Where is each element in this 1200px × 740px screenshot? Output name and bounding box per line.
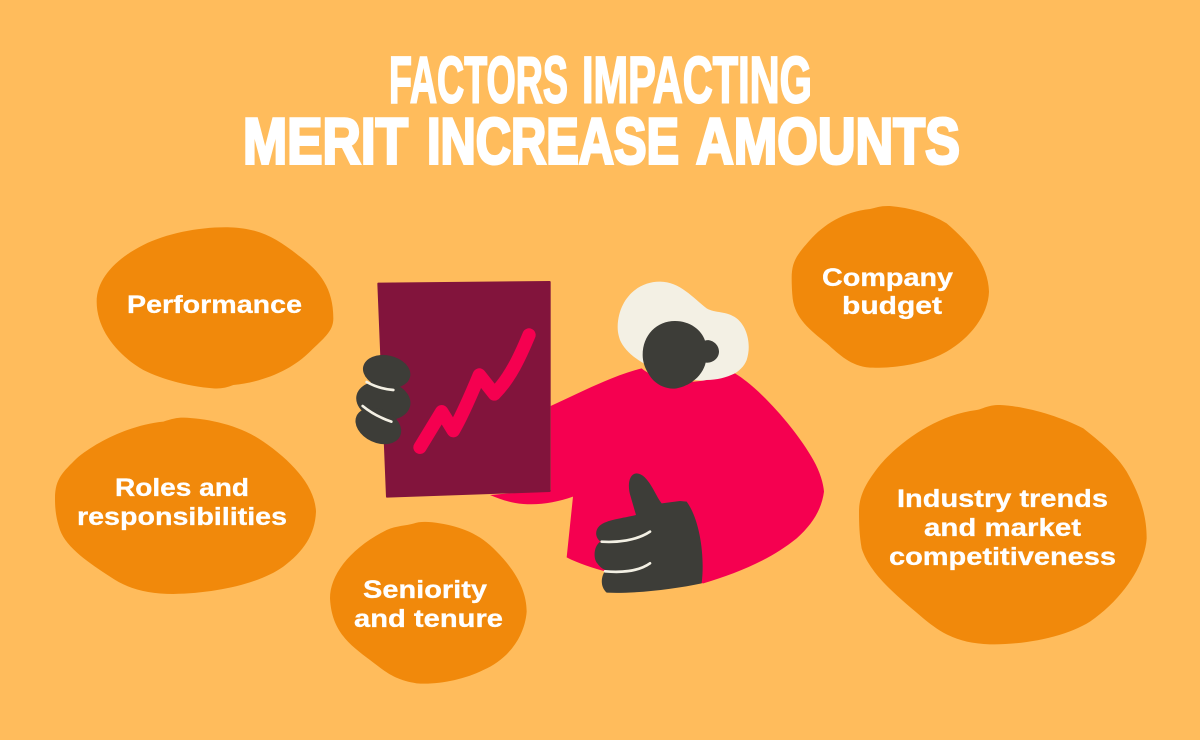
icon: right hand thumbs up <box>595 473 703 593</box>
chart line <box>420 335 529 447</box>
panel: roles and responsibilities <box>55 418 316 594</box>
icon: white hair <box>618 282 749 381</box>
panel: performance: Performance <box>127 291 302 319</box>
icon: pink torso and arm <box>490 368 824 583</box>
panel: industry trends and market competitiveness: competitiveness <box>889 543 1116 571</box>
title <box>243 42 960 178</box>
chart document <box>378 282 550 497</box>
panel: seniority and tenure <box>330 522 527 684</box>
panel: company budget: budget <box>842 292 943 320</box>
panel: industry trends and market competitiveness: Industry trends <box>897 485 1108 513</box>
title: INCREASE <box>427 104 679 178</box>
title: FACTORS <box>389 42 568 116</box>
panel: seniority and tenure: and tenure <box>354 605 503 633</box>
panel: company budget: Company <box>822 264 953 292</box>
panel: roles and responsibilities: Roles and <box>115 474 249 502</box>
title: MERIT <box>243 104 408 178</box>
panel: industry trends and market competitiveness <box>859 405 1147 644</box>
panel: company budget <box>792 206 989 368</box>
illustration: person holding chart with thumbs up <box>350 282 824 593</box>
title: IMPACTING <box>582 42 812 116</box>
icon: left hand gripping chart <box>350 351 414 451</box>
title: AMOUNTS <box>696 104 960 178</box>
panel: performance <box>97 227 333 389</box>
icon: head <box>643 321 719 389</box>
panel: industry trends and market competitiveness: and market <box>924 514 1082 542</box>
panel: roles and responsibilities: responsibilities <box>77 503 287 531</box>
panel: seniority and tenure: Seniority <box>363 576 487 604</box>
